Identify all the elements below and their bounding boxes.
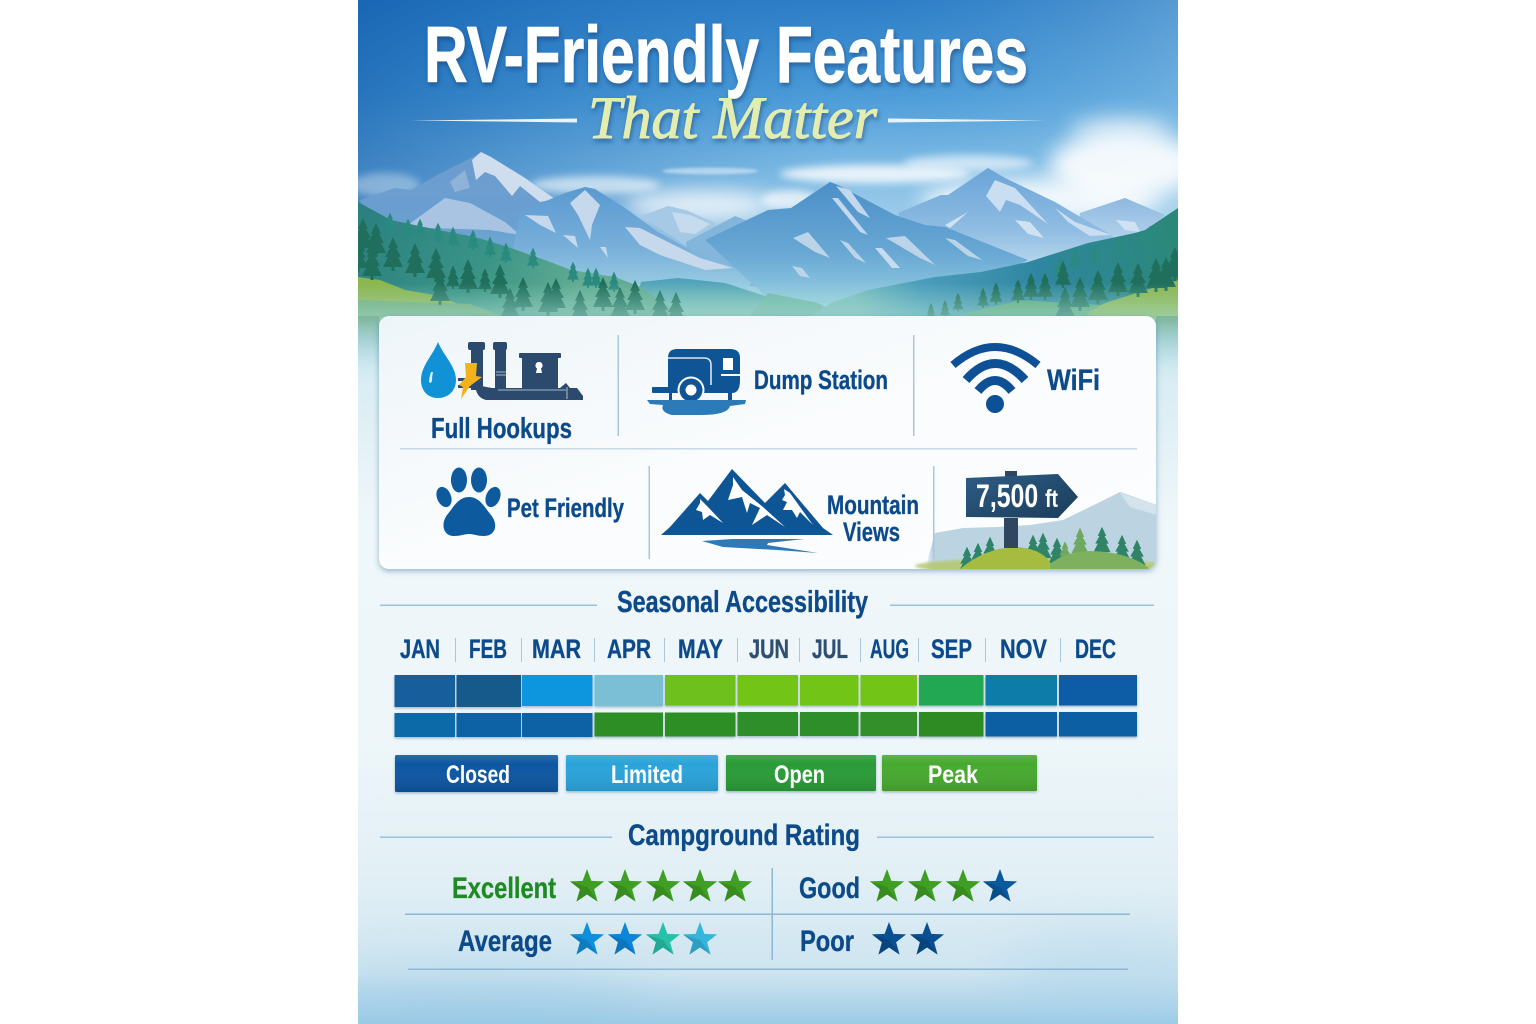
rule: rating right [877, 836, 1154, 838]
rule: seasonal right [890, 604, 1154, 606]
calendar row 1 [394, 675, 1137, 707]
month labels: DEC [1075, 634, 1116, 664]
mountain: right peak [898, 168, 1113, 254]
legend: open [726, 755, 876, 791]
icon: lightning [459, 363, 482, 399]
month labels: AUG [870, 634, 909, 664]
month labels: JAN [400, 634, 440, 664]
mountain: center peak [705, 182, 1028, 305]
legend: closed: Closed [446, 761, 510, 789]
clouds [350, 116, 1200, 222]
trees: near [348, 218, 1185, 326]
rating: Good: Good [799, 872, 860, 905]
mountain: far left peak [644, 206, 755, 286]
title rule left [410, 118, 577, 122]
month labels: NOV [1000, 634, 1047, 664]
month separators [455, 638, 1061, 662]
month labels [400, 634, 1116, 664]
divider: v3 [648, 466, 650, 559]
legend: peak: Peak [928, 761, 978, 789]
rating grid lines [405, 868, 1130, 970]
legend [395, 755, 1037, 792]
icon: pipes and hookup [458, 342, 583, 400]
text: Full Hookups: Full Hookups [431, 413, 572, 445]
mountain: far right peak [1080, 198, 1164, 232]
month labels: JUL [812, 634, 848, 664]
month labels: SEP [931, 634, 972, 664]
icon: mountains and lake [661, 469, 833, 553]
heading: Campground Rating: Campground Rating [628, 819, 860, 852]
legend: limited: Limited [611, 761, 683, 789]
mountain: second peak [514, 187, 751, 286]
text: 7,500 ft: 7,500 ft [976, 478, 1059, 514]
mountains [358, 152, 1178, 325]
title rule right [888, 118, 1045, 122]
text: Mountain Views: Views [843, 517, 900, 547]
text: Mountain Views [827, 490, 919, 547]
text: Pet Friendly: Pet Friendly [507, 493, 624, 523]
side fade left [358, 316, 379, 356]
foliage: olive [358, 277, 1178, 322]
legend: peak [882, 755, 1037, 791]
calendar row 2 [394, 712, 1137, 737]
legend: limited [566, 755, 718, 791]
icon: elevation sign [966, 471, 1078, 548]
trees: far [384, 213, 1156, 292]
month labels: APR [607, 634, 651, 664]
rule: rating left [380, 836, 612, 838]
divider: v2 [913, 335, 914, 436]
title: RV-Friendly Features [424, 10, 1028, 99]
rating: Excellent [452, 869, 752, 905]
foreground hills and forest [348, 202, 1185, 366]
mountain: misty base [379, 286, 1156, 324]
month labels: JUN [749, 634, 789, 664]
rating: Excellent: Excellent [452, 872, 556, 905]
rating: Average [458, 922, 717, 958]
scene: altitude backdrop [914, 492, 1156, 569]
month labels: FEB [469, 634, 507, 664]
legend: closed [395, 755, 558, 792]
divider: v4 [933, 466, 934, 559]
icon: water drop [421, 342, 456, 398]
side fade right [1156, 316, 1178, 356]
rating: Poor [800, 922, 944, 958]
mountain: left peak [360, 152, 554, 248]
forest: right ridge [801, 208, 1178, 322]
hills: low centre [640, 278, 766, 316]
panel: features [379, 316, 1165, 576]
month labels: MAY [678, 634, 723, 664]
rating: Average: Average [458, 925, 552, 958]
heading: Seasonal Accessibility: Seasonal Accessibility [617, 584, 869, 619]
rating: Good [799, 869, 1017, 905]
month labels: MAR [532, 634, 581, 664]
text: WiFi: WiFi [1047, 364, 1100, 397]
legend: open: Open [774, 761, 825, 789]
forest: left ridge [358, 202, 671, 316]
rule: seasonal left [380, 604, 597, 606]
text: Dump Station: Dump Station [754, 365, 888, 395]
icon: trailer [647, 349, 746, 415]
background: poster [358, 0, 1178, 1024]
divider: v1 [618, 335, 619, 436]
mist: forest floor [358, 283, 1178, 323]
subtitle: That Matter [588, 85, 878, 151]
text: Mountain Views: Mountain [827, 490, 919, 520]
icon: wifi [953, 347, 1038, 413]
divider: h [400, 448, 1137, 450]
rating: Poor: Poor [800, 925, 854, 958]
icon: paw [434, 468, 503, 536]
